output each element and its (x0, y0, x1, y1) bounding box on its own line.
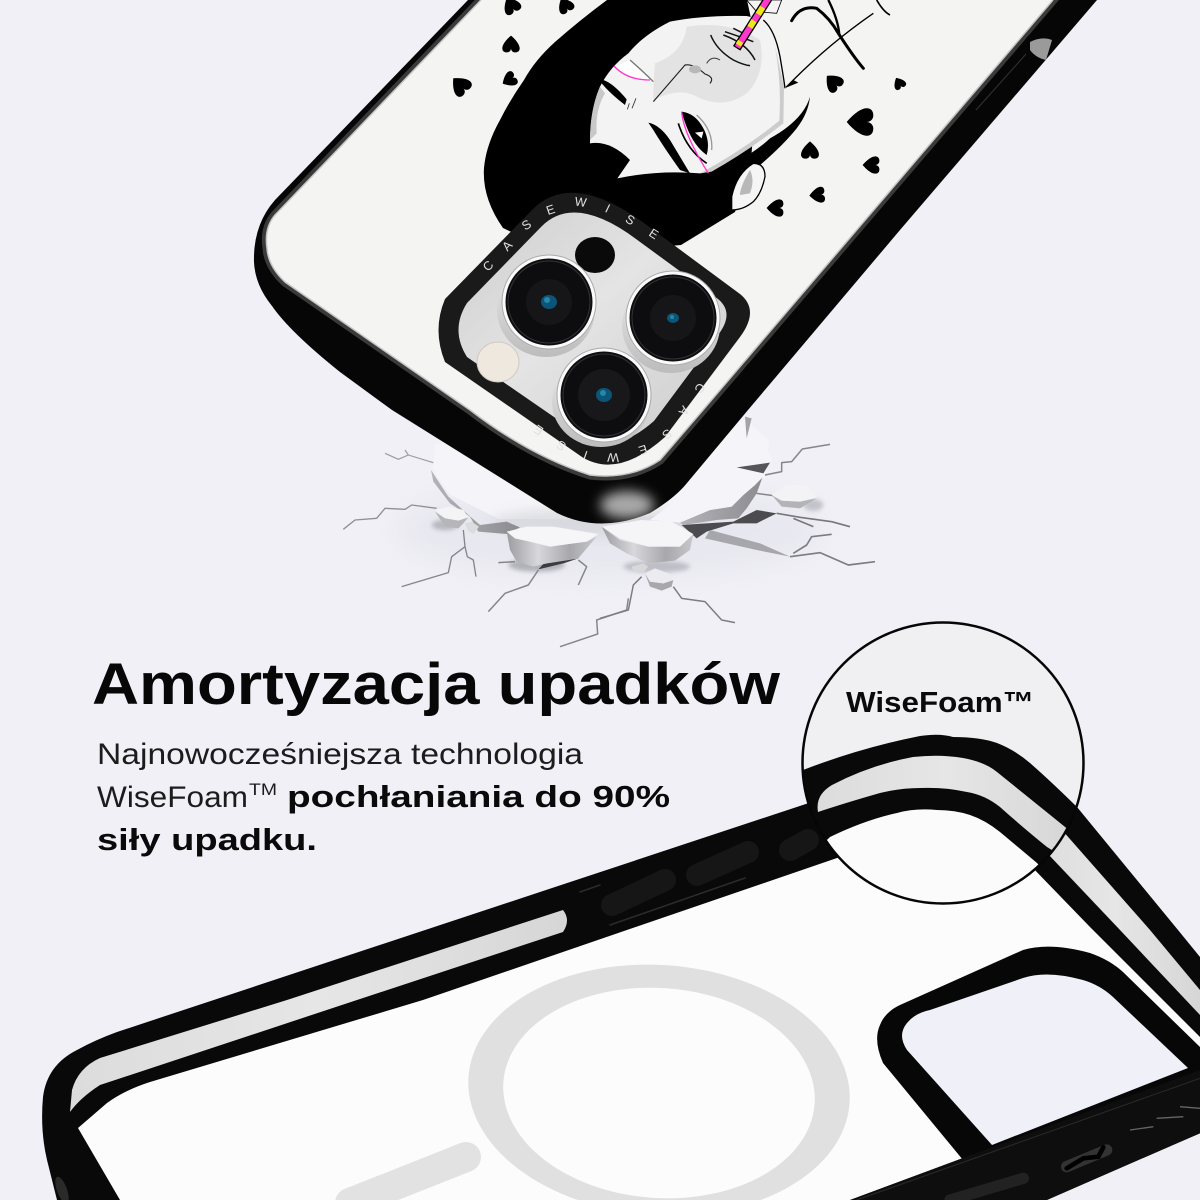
artwork: face (590, 0, 890, 210)
magnifier outline (802, 622, 1084, 904)
side buttons, left band (580, 840, 808, 925)
camera lens 2 (622, 271, 720, 373)
magnetic ring (460, 952, 858, 1200)
camera cutout frame (877, 947, 1200, 1160)
description line 2, bold part: pochłaniania do 90% (287, 779, 670, 814)
brand text on camera ring, lower arc: CASEWISE (534, 384, 704, 462)
case back panel (266, 0, 1053, 476)
side band details, lower right (850, 1070, 1200, 1200)
port hole, lower left (53, 1175, 71, 1200)
camera plate (458, 213, 726, 444)
description line 3: siły upadku. (97, 822, 317, 857)
phone with printed case, falling onto the ground (254, 0, 1097, 524)
panel highlight (266, 0, 1053, 476)
description text (97, 738, 670, 857)
camera cutout opening (902, 974, 1188, 1145)
magnifier content (804, 734, 1076, 869)
trademark superscript: TM (249, 780, 277, 799)
cracked ground impact (343, 417, 875, 647)
flash (477, 342, 519, 382)
side gap along left edge (70, 910, 567, 1112)
camera bump ring (438, 193, 750, 465)
description line 1: Najnowocześniejsza technologia (97, 738, 583, 771)
clear case, back view (42, 760, 1200, 1200)
side gap along right edge (1030, 805, 1200, 1015)
transparent back (78, 838, 1200, 1200)
camera lens 1 (497, 255, 596, 357)
artwork: hair (484, 0, 760, 255)
brand text on camera ring, upper arc: CASEWISE (484, 196, 659, 270)
lidar sensor (575, 237, 615, 273)
description line 2, regular part: WiseFoam (97, 781, 248, 814)
case outer bumper (254, 0, 1097, 524)
artwork: scattered hearts (446, 0, 907, 217)
magnifier callout: WiseFoam (801, 621, 1085, 905)
magnet alignment bar (350, 1157, 466, 1200)
title: Amortyzacja upadków (92, 652, 781, 717)
camera lens 3 (552, 348, 651, 447)
bumper glare (600, 38, 1052, 519)
magnifier label: WiseFoam™ (846, 687, 1034, 719)
case frame (42, 760, 1200, 1200)
